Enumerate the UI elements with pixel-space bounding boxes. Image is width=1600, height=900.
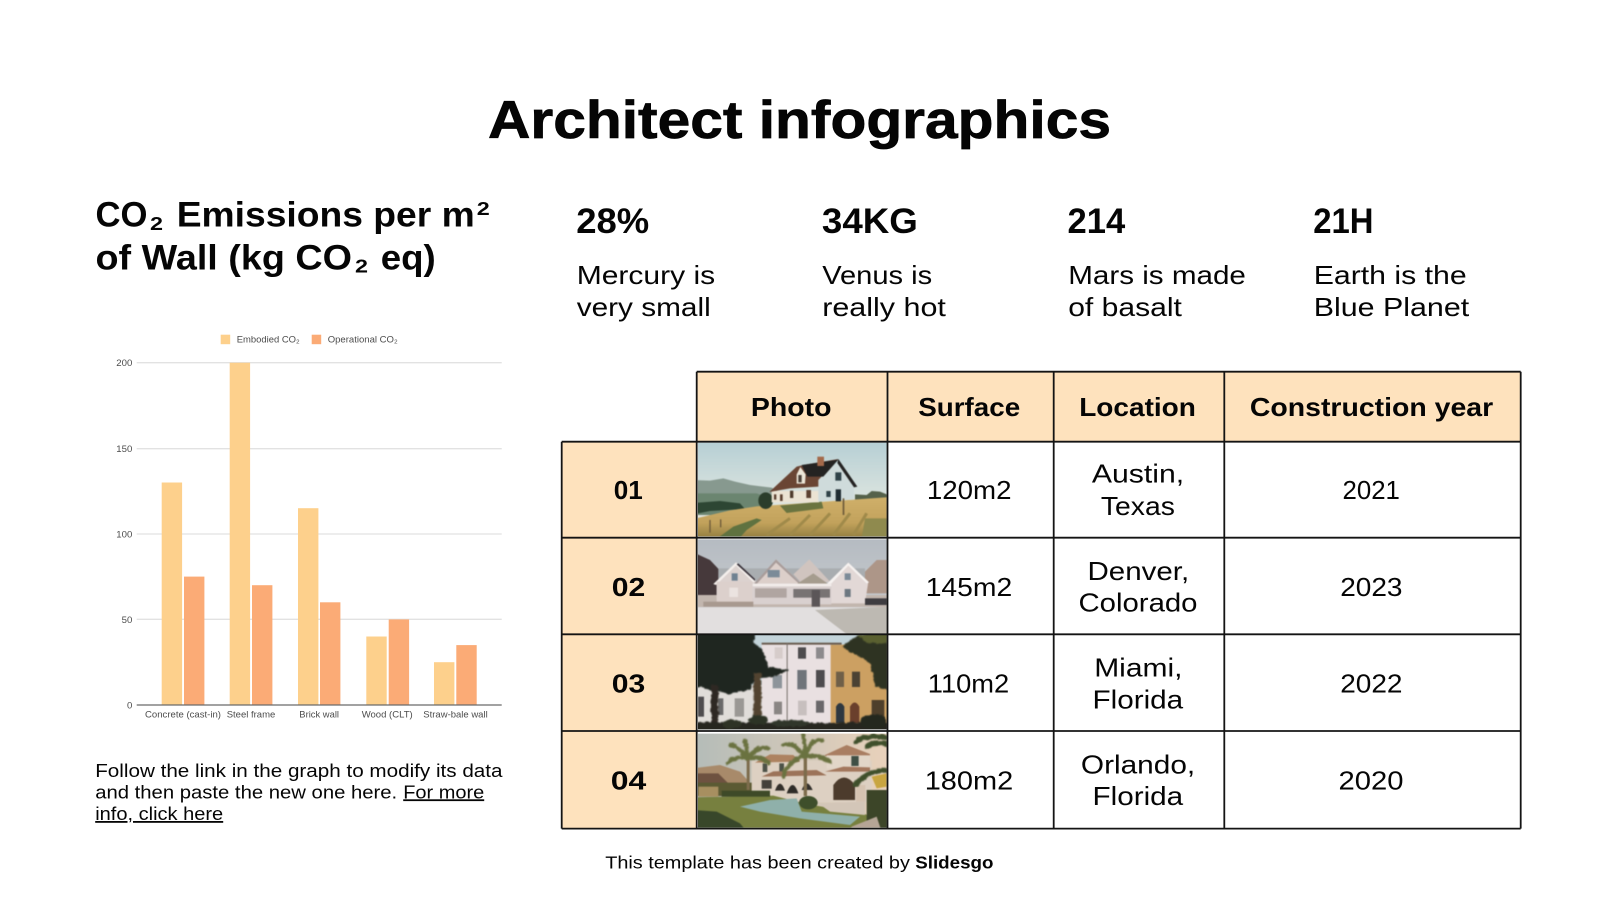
chart heading: of Wall (kg CO (96, 238, 352, 277)
y axis labels: 0 (127, 700, 132, 712)
row 01 (614, 459, 1400, 521)
row 01: Austin, (1092, 459, 1184, 489)
stat: 21H: Blue Planet (1314, 292, 1470, 322)
photo 2: white gabled house in snow (698, 539, 887, 634)
table grid lines (562, 372, 1521, 829)
footer credit: This template has been created by (605, 852, 910, 872)
chart note text: For more (403, 782, 484, 802)
y axis labels: 150 (116, 444, 132, 455)
y axis labels: 50 (122, 615, 132, 626)
stat: 28%: 28% (576, 202, 649, 241)
stat: 34KG (822, 202, 947, 322)
table header labels: Location (1079, 392, 1196, 422)
row 03: Miami, (1094, 653, 1183, 683)
row 01: 2021 (1343, 475, 1400, 505)
title: Architect infographics (488, 91, 1111, 150)
chart heading: CO (96, 196, 148, 235)
chart heading: eq) (381, 238, 436, 277)
chart note text: and then paste the new one here. (95, 782, 397, 802)
table header labels: Construction year (1250, 392, 1493, 422)
chart legend: Embodied CO₂ (237, 335, 300, 346)
photo 1: country house on a hill (698, 442, 887, 536)
table (562, 372, 1521, 832)
row 02: 02 (612, 572, 645, 602)
table header labels: Surface (918, 392, 1020, 422)
row 04: 2020 (1339, 765, 1404, 795)
stat: 21H (1313, 202, 1470, 322)
stat: 214 (1068, 202, 1246, 322)
chart legend: Operational CO₂ (328, 335, 398, 346)
row 02: Denver, (1088, 556, 1189, 586)
slide canvas (95, 99, 1522, 872)
stat: 21H: Earth is the (1314, 260, 1467, 290)
photo 3: townhouses behind trees (693, 632, 890, 732)
row 03: 2022 (1340, 669, 1403, 699)
y axis labels: 200 (116, 358, 132, 369)
footer credit (605, 852, 994, 872)
row 02 (612, 556, 1402, 618)
stat: 214: of basalt (1068, 292, 1183, 322)
chart heading: Emissions per m (177, 196, 475, 235)
row 04: 180m2 (925, 765, 1013, 795)
row 03: 110m2 (928, 669, 1009, 699)
table header labels (751, 392, 1493, 422)
row 01: Texas (1101, 491, 1175, 521)
x axis labels: Steel frame (227, 710, 275, 721)
row 01: 120m2 (927, 475, 1011, 505)
row 03 (612, 653, 1402, 714)
row 02: 2023 (1340, 572, 1403, 602)
y axis labels: 100 (116, 530, 132, 540)
chart note text (95, 761, 504, 824)
table header labels: Photo (751, 392, 831, 422)
x axis labels: Straw-bale wall (423, 710, 488, 721)
stat: 214: 214 (1068, 202, 1126, 241)
x axis labels: Brick wall (299, 710, 339, 721)
x axis labels: Concrete (cast-in) (145, 710, 221, 721)
stat: 21H: 21H (1313, 202, 1374, 241)
chart legend (221, 335, 398, 346)
x axis labels: Wood (CLT) (362, 710, 413, 721)
chart heading: 2 (477, 199, 490, 219)
chart note text: info, click here (95, 804, 223, 824)
operational CO2 bars (184, 577, 477, 705)
row 02: Colorado (1079, 588, 1198, 618)
photo 4: villa with palm trees and pool (698, 734, 887, 828)
embodied CO2 bars (162, 363, 454, 705)
row 03: 03 (612, 669, 645, 699)
x axis labels (145, 710, 488, 721)
stat: 34KG: really hot (822, 292, 947, 322)
stat: 34KG: 34KG (822, 202, 918, 241)
row 04: 04 (611, 765, 647, 795)
footer credit: Slidesgo (915, 852, 994, 872)
stat: 34KG: Venus is (822, 260, 932, 290)
stat: 214: Mars is made (1068, 260, 1246, 290)
y axis labels (116, 358, 132, 712)
chart heading: 2 (150, 214, 163, 234)
row 04 (611, 749, 1404, 811)
stat: 28%: Mercury is (577, 260, 715, 290)
row 01: 01 (614, 475, 643, 505)
chart heading (96, 196, 490, 277)
bar chart: CO2 emissions (116, 335, 502, 721)
chart heading: 2 (355, 257, 368, 277)
stat: 28%: very small (577, 292, 711, 322)
row number column background (562, 442, 697, 828)
row 04: Florida (1093, 781, 1184, 811)
row 04: Orlando, (1081, 749, 1195, 779)
row 03: Florida (1093, 684, 1184, 714)
stat: 28% (576, 202, 715, 322)
table header background (697, 372, 1521, 442)
row 02: 145m2 (926, 572, 1012, 602)
chart note text: Follow the link in the graph to modify its data (95, 761, 504, 781)
